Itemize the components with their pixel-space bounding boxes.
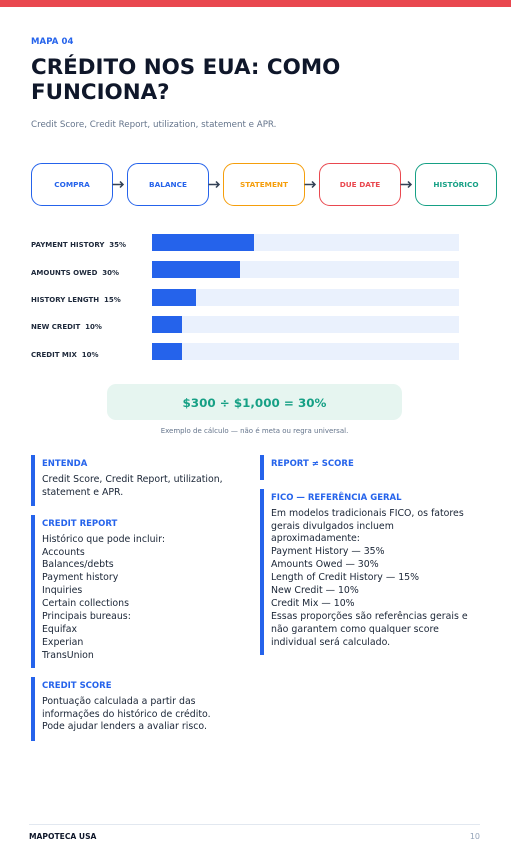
arrow — [304, 181, 316, 188]
heading: REPORT ≠ SCORE — [271, 459, 354, 469]
bar: history length — [152, 289, 459, 306]
heading: CREDIT SCORE — [42, 681, 112, 691]
text block: informações do histórico de crédito. — [42, 708, 211, 720]
step: compra: COMPRA — [54, 180, 90, 189]
panel: report vs score — [260, 455, 475, 480]
text block: Equifax — [42, 624, 77, 635]
text block: Certain collections — [42, 598, 129, 609]
text block: New Credit — 10% — [271, 585, 359, 596]
formula callout — [107, 384, 402, 420]
label: amounts owed: AMOUNTS OWED 30% — [31, 269, 119, 277]
text block: statement e APR. — [42, 486, 123, 498]
text block — [42, 534, 165, 661]
text block: não garantem como qualquer score — [271, 624, 439, 635]
label: credit mix: CREDIT MIX 10% — [31, 351, 99, 359]
text block: gerais divulgados incluem — [271, 520, 394, 532]
label: history length: HISTORY LENGTH 15% — [31, 296, 121, 304]
step: balance: BALANCE — [149, 180, 187, 189]
heading: CREDIT REPORT — [42, 519, 117, 529]
page number: 10 — [470, 832, 480, 841]
text block: Accounts — [42, 546, 85, 558]
top accent bar — [0, 0, 511, 7]
text block: individual será calculado. — [271, 637, 390, 648]
arrow — [208, 181, 220, 188]
step: compra — [31, 163, 113, 206]
text block: Experian — [42, 637, 83, 648]
step: histórico — [415, 163, 497, 206]
text block: Balances/debts — [42, 559, 114, 570]
text block: Pode ajudar lenders a avaliar risco. — [42, 721, 207, 732]
panel: fico — [260, 489, 475, 655]
text block: Inquiries — [42, 585, 82, 596]
formula callout: $300 ÷ $1,000 = 30% — [183, 396, 326, 410]
eyebrow label: MAPA 04 — [31, 37, 74, 47]
bar: credit mix — [152, 343, 459, 360]
step: statement: STATEMENT — [240, 180, 288, 189]
step: statement — [223, 163, 305, 206]
text block: Payment history — [42, 572, 118, 583]
formula caption: Exemplo de cálculo — não é meta ou regra universal. — [161, 427, 348, 435]
bar chart: FICO factors — [31, 234, 459, 360]
title: CRÉDITO NOS EUA: COMO — [31, 55, 340, 80]
text block: Essas proporções são referências gerais e — [271, 611, 468, 622]
text block: TransUnion — [42, 650, 94, 661]
footer — [29, 824, 480, 845]
text block: Em modelos tradicionais FICO, os fatores — [271, 508, 464, 519]
text block: Payment History — 35% — [271, 546, 385, 557]
panel: entenda — [31, 455, 246, 506]
text block: Credit Mix — 10% — [271, 598, 355, 609]
text block: Length of Credit History — 15% — [271, 572, 419, 583]
label: payment history: PAYMENT HISTORY 35% — [31, 241, 126, 249]
title: FUNCIONA? — [31, 80, 170, 105]
text block: Principais bureaus: — [42, 611, 131, 622]
heading: FICO — REFERÊNCIA GERAL — [271, 493, 402, 503]
text block: aproximadamente: — [271, 533, 360, 544]
flow diagram — [31, 163, 497, 206]
step: due date: DUE DATE — [340, 180, 380, 189]
step: histórico: HISTÓRICO — [433, 180, 479, 189]
arrow — [112, 181, 124, 188]
text block — [42, 696, 211, 732]
arrow — [400, 181, 412, 188]
text block: Histórico que pode incluir: — [42, 534, 165, 545]
panel: credit report — [31, 515, 246, 668]
bar: new credit — [152, 316, 459, 333]
title — [31, 54, 340, 105]
text block: Credit Score, Credit Report, utilization, — [42, 474, 223, 485]
heading: ENTENDA — [42, 459, 87, 469]
text block: Pontuação calculada a partir das — [42, 696, 196, 707]
text block — [42, 474, 223, 498]
step: balance — [127, 163, 209, 206]
label: new credit: NEW CREDIT 10% — [31, 323, 102, 331]
subtitle: Credit Score, Credit Report, utilization, statement e APR. — [31, 120, 276, 130]
text block — [271, 508, 468, 648]
panel: credit score — [31, 677, 246, 741]
bar: amounts owed — [152, 261, 459, 278]
bar: payment history — [152, 234, 459, 251]
footer brand: MAPOTECA USA — [29, 832, 96, 841]
step: due date — [319, 163, 401, 206]
text block: Amounts Owed — 30% — [271, 559, 379, 570]
